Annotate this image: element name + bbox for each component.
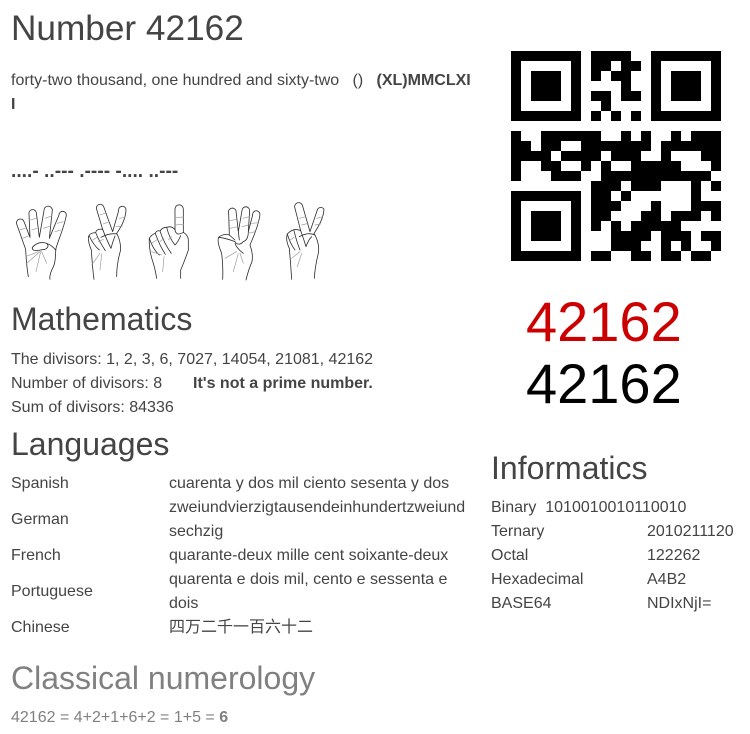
language: Portuguese: quarenta e dois mil, cento e sessenta e <box>169 571 447 588</box>
icon: hand sign 2 <box>88 204 126 279</box>
red number: 42162 <box>526 290 682 353</box>
language: French: quarante-deux mille cent soixante-deux <box>169 547 448 564</box>
binary: Binary 1010010010110010 <box>491 499 686 516</box>
numerology calculation: 42162 = 4+2+1+6+2 = 1+5 = 6 <box>11 709 228 726</box>
mathematics facts: Number of divisors: 8 <box>11 375 162 392</box>
language: German <box>11 499 465 540</box>
base64: BASE64 <box>491 595 551 612</box>
language: German: zweiundvierzigtausendeinhundertzweiund <box>169 499 465 516</box>
black number: 42162 <box>526 352 682 415</box>
language: Portuguese <box>11 571 447 612</box>
language: Chinese: 四万二千一百六十二 <box>169 619 313 636</box>
informatics table <box>491 499 734 612</box>
hexadecimal <box>491 571 686 588</box>
language: Chinese <box>11 618 313 636</box>
language: Chinese: Chinese <box>11 619 70 636</box>
ternary: Ternary <box>491 523 544 540</box>
language: Portuguese: Portuguese <box>11 583 93 600</box>
heading: Languages: Languages <box>11 426 169 462</box>
octal: 122262 <box>647 547 700 564</box>
language: Spanish: Spanish <box>11 475 69 492</box>
icon: hand sign 4 <box>16 206 66 279</box>
number in words and Roman numeral <box>11 72 471 113</box>
language: French <box>11 547 448 564</box>
language: Spanish <box>11 475 449 492</box>
icon: hand sign 6 <box>218 207 260 280</box>
icon: hand sign 2 <box>287 203 324 279</box>
hexadecimal: A4B2 <box>647 571 686 588</box>
octal <box>491 547 700 564</box>
languages table <box>11 475 465 636</box>
morse code: ....- ..--- .---- -.... ..--- <box>11 161 178 182</box>
ternary: 2010211120 <box>647 523 734 540</box>
language: Spanish: cuarenta y dos mil ciento sesenta y dos <box>169 475 449 492</box>
icon: hand sign 1 <box>149 205 188 278</box>
title: Number 42162 <box>11 9 244 48</box>
language: Portuguese: dois <box>169 595 198 612</box>
mathematics facts: It's not a prime number. <box>193 375 373 392</box>
number in words and Roman numeral: forty-two thousand, one hundred and sixty-two () (XL)MMCLXI <box>11 72 471 89</box>
base64 <box>491 595 711 612</box>
ternary <box>491 523 734 540</box>
number in words and Roman numeral: I <box>11 96 15 113</box>
base64: NDIxNjI= <box>647 595 711 612</box>
octal: Octal <box>491 547 528 564</box>
sign language hands <box>16 202 324 280</box>
language: German: sechzig <box>169 523 223 540</box>
mathematics facts: The divisors: 1, 2, 3, 6, 7027, 14054, 21081, 42162 <box>11 351 373 368</box>
heading: Classical numerology: Classical numerology <box>11 660 315 696</box>
mathematics facts: Sum of divisors: 84336 <box>11 399 174 416</box>
heading: Informatics: Informatics <box>491 450 647 486</box>
QR code <box>511 51 721 261</box>
hexadecimal: Hexadecimal <box>491 571 583 588</box>
language: French: French <box>11 547 61 564</box>
language: German: German <box>11 511 69 528</box>
heading: Mathematics: Mathematics <box>11 301 192 337</box>
mathematics facts <box>11 351 373 416</box>
